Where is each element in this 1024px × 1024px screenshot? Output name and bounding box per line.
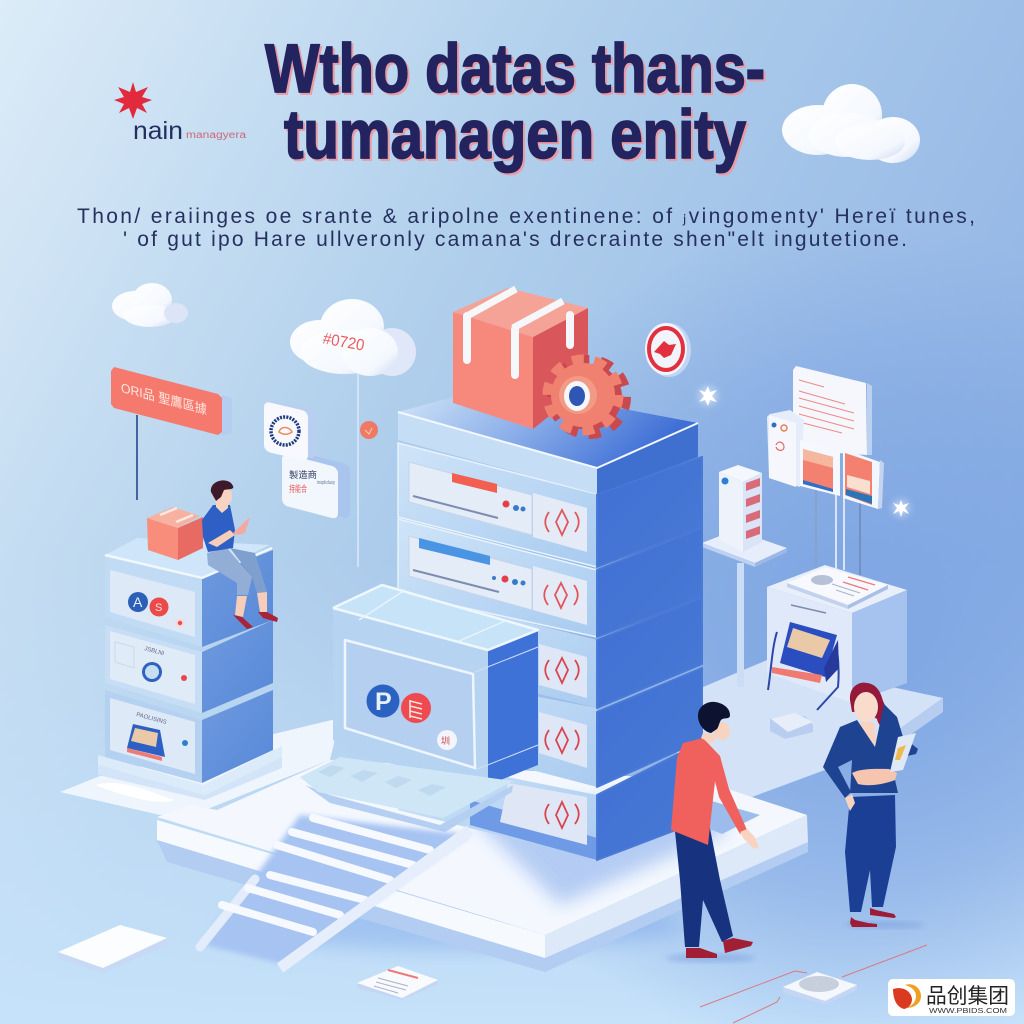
watermark logo: 品创集团 <box>926 985 1009 1008</box>
left stack base sheet <box>60 718 340 815</box>
icon: red circle badge <box>645 323 691 377</box>
ladder <box>200 815 470 968</box>
shelf with server tower <box>702 465 787 687</box>
icon: A badge: A <box>133 594 143 610</box>
sign: red label: ORI品 聖鷹區據 <box>121 380 207 417</box>
floor card <box>58 925 167 973</box>
cards: emblem and text: inspkdusy <box>317 480 335 486</box>
left unit 2: JSBLNI <box>143 646 165 657</box>
icon: P badge: P <box>375 688 392 716</box>
right cabinet with document and tablet chair <box>767 565 907 710</box>
logo: nain: managyera <box>186 130 247 141</box>
unit 1 <box>398 443 702 567</box>
subtitle text <box>77 205 975 251</box>
subtitle text: Thon/ eraiinges oe srante & aripolne exentinene: of ⱼvingomenty' Hereï tunes, <box>77 205 975 228</box>
icon: S badge: S <box>155 602 162 614</box>
box: small parcel <box>147 507 203 560</box>
cards: emblem and text: 製造商 <box>289 469 317 480</box>
lid <box>398 385 698 494</box>
icon: red list badge <box>401 693 431 723</box>
right scene floor platform <box>640 660 943 797</box>
unit 3 <box>398 590 702 708</box>
unit 5 <box>398 742 702 860</box>
icon: small seal: 圳 <box>441 736 450 746</box>
unit 4 <box>398 668 702 787</box>
floor device with circuit lines <box>700 945 927 1023</box>
cloud: small left <box>112 283 188 327</box>
left unit 1 <box>105 538 273 647</box>
sparkles <box>699 386 909 517</box>
main server stack <box>398 385 702 860</box>
left server stack <box>98 538 282 795</box>
main platform <box>157 760 808 972</box>
cloud: label with pole: #0720 <box>321 331 366 355</box>
dot: orange marker <box>360 421 378 439</box>
keyboard tray <box>300 757 513 832</box>
box: large parcel <box>453 288 588 429</box>
icon: A badge <box>128 592 148 612</box>
unit 2 <box>398 519 702 637</box>
title: Wtho datas thans- <box>265 30 765 107</box>
gear <box>547 359 626 434</box>
person: seated with tablet <box>202 480 278 629</box>
icon: S badge <box>150 598 168 616</box>
left unit 2 <box>105 620 273 713</box>
watermark logo <box>888 979 1015 1016</box>
cards: emblem and text <box>264 400 350 520</box>
icon: P badge <box>366 684 400 718</box>
cloud: top right <box>782 84 920 163</box>
title: tumanagen enity <box>284 96 746 173</box>
small device on floor <box>770 713 813 739</box>
document panels on posts <box>767 366 884 575</box>
person: woman with tablet <box>823 683 925 928</box>
icon: small seal <box>437 730 457 750</box>
front printer unit <box>333 585 538 785</box>
cloud: label with pole <box>290 299 416 567</box>
title: tumanagen enity <box>286 98 748 175</box>
left unit 3 <box>105 690 273 783</box>
watermark logo: WWW.PBIDS.COM <box>929 1006 1007 1015</box>
logo: nain: nain <box>133 117 183 145</box>
cards: emblem and text: 持能合 <box>289 483 307 494</box>
subtitle text: ' of gut ipo Hare ullveronly camana's drecrainte shen"elt ingutetione. <box>123 228 907 251</box>
logo: nain <box>114 82 247 145</box>
person: man in red <box>665 702 759 962</box>
floor document <box>357 966 438 1000</box>
left unit 3: PAOLISINS <box>135 712 167 726</box>
title: Wtho datas thans- <box>267 32 767 109</box>
title <box>265 30 767 175</box>
sign: red label <box>111 367 232 500</box>
